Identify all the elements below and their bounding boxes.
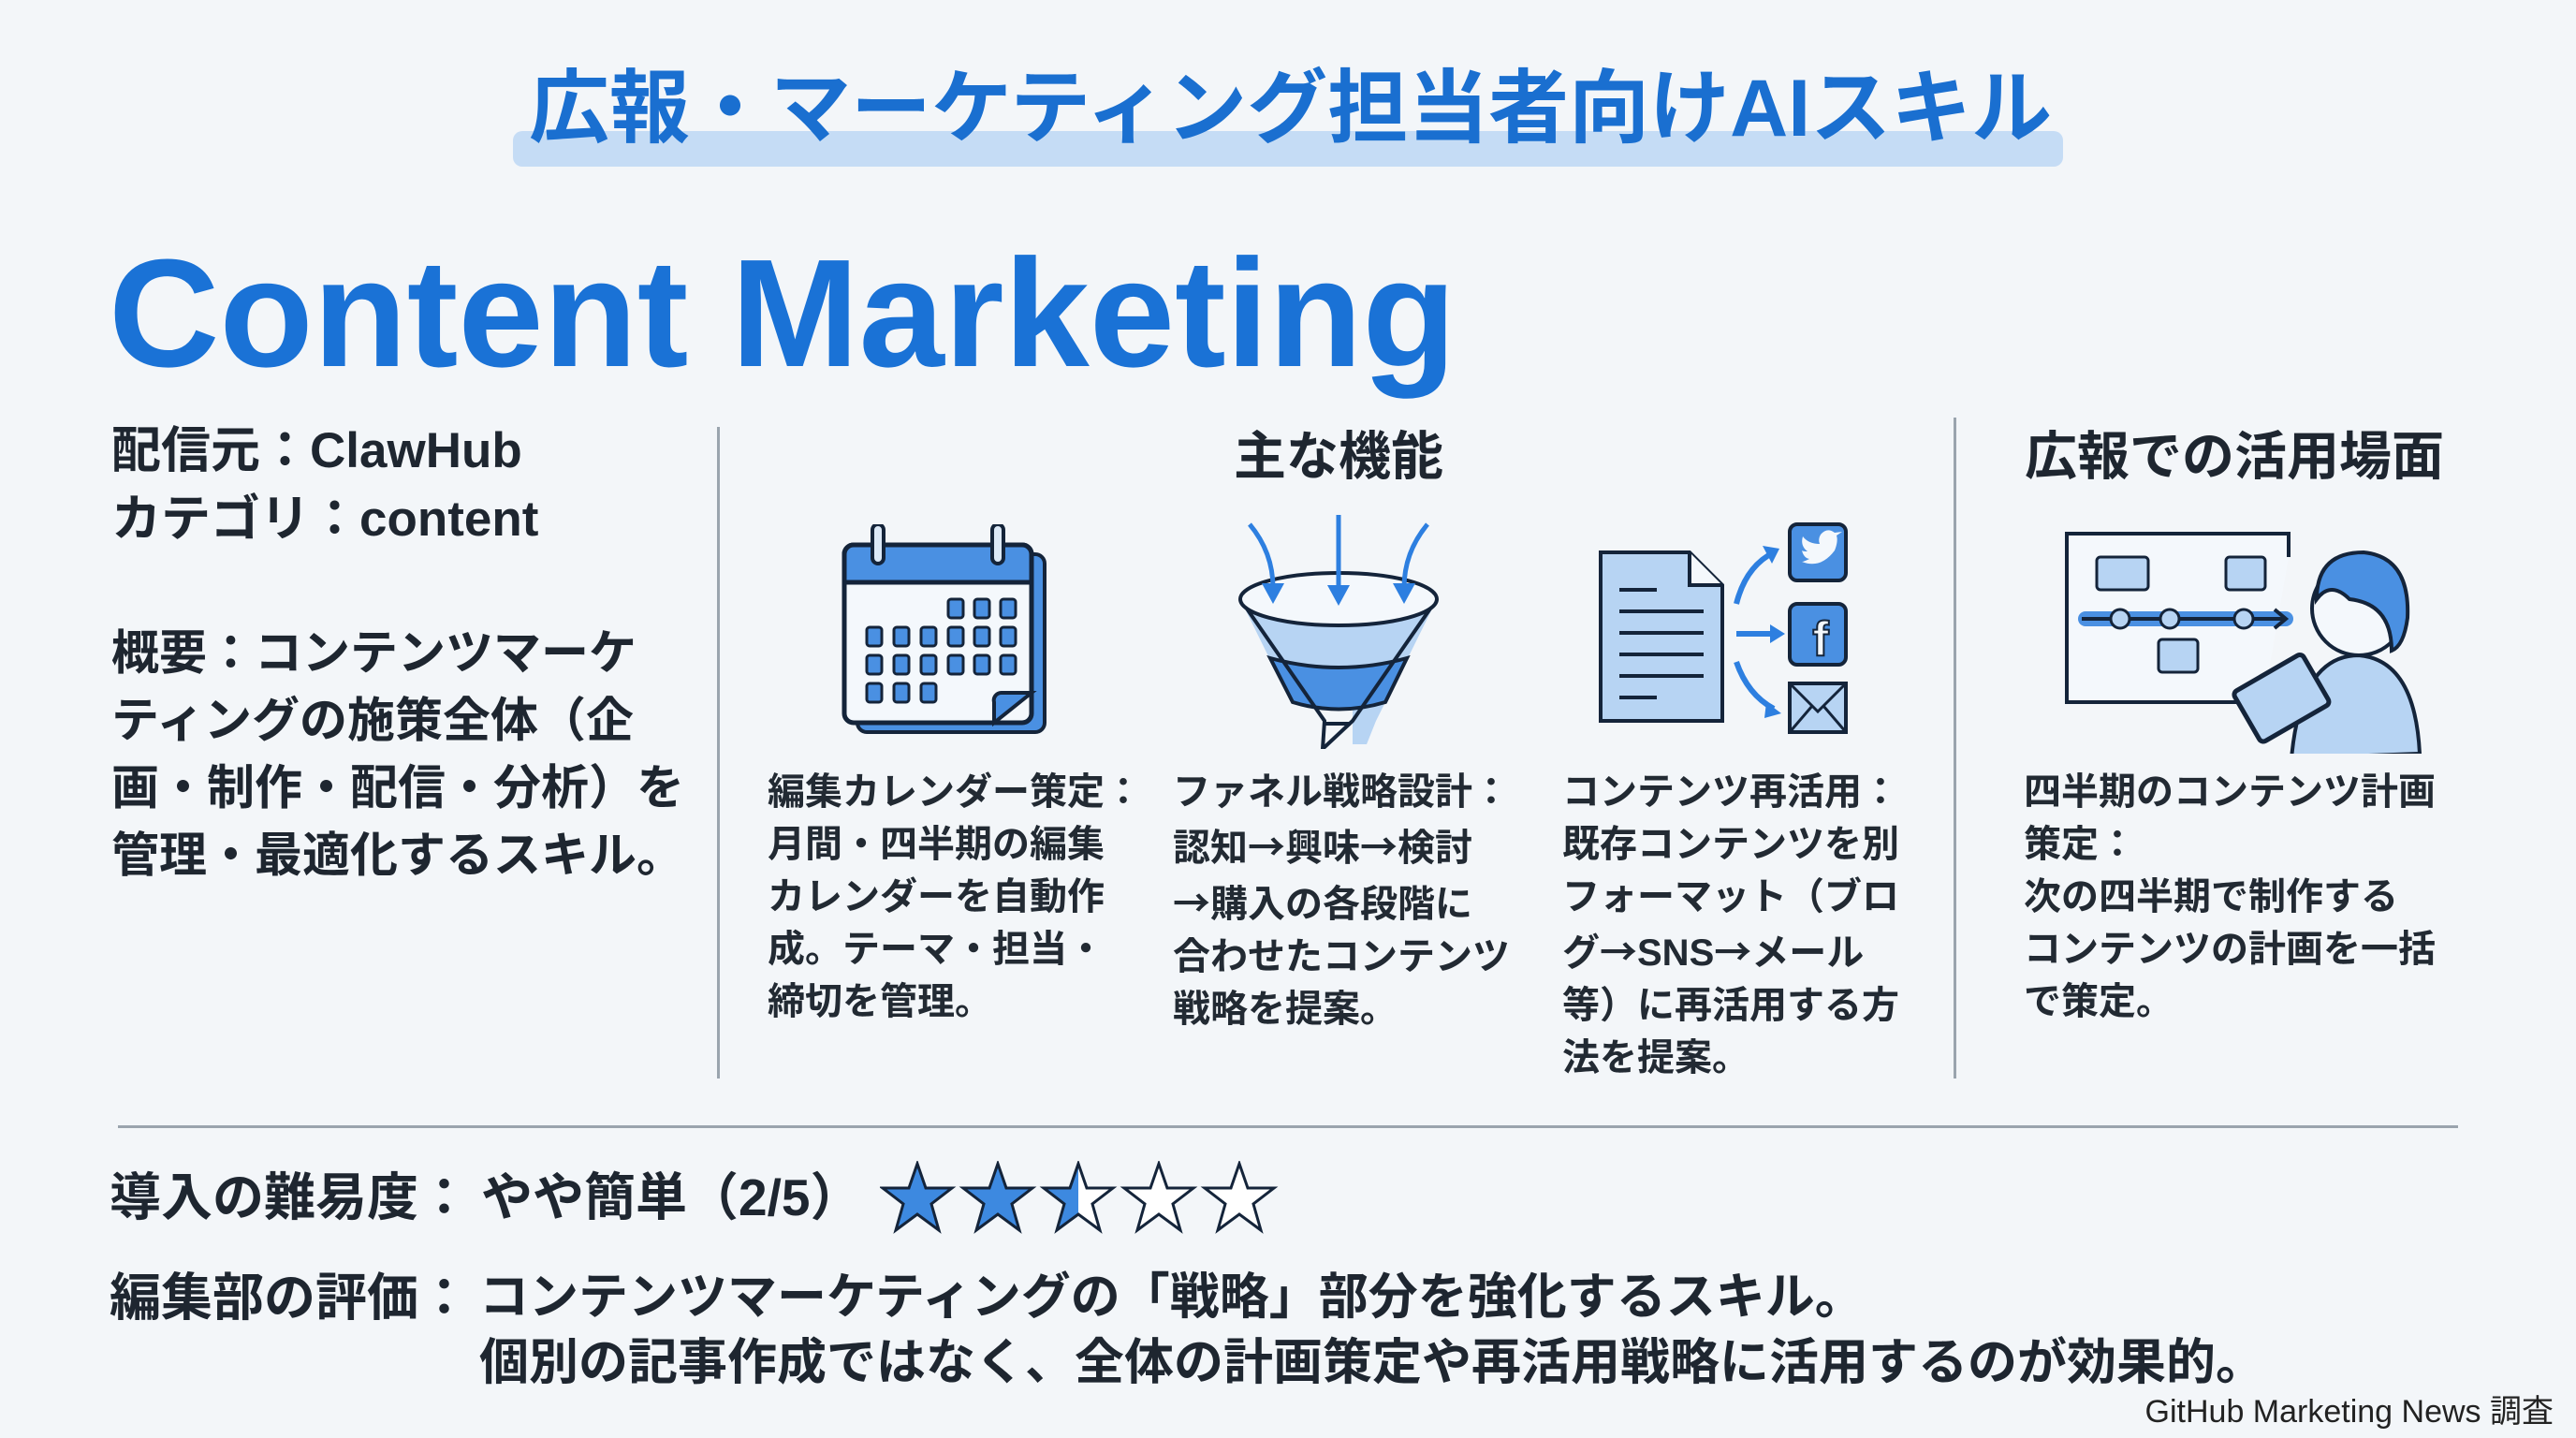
feature text 1: 成。テーマ・担当・ (768, 929, 1105, 970)
feature text 3: フォーマット（ブロ (1562, 876, 1899, 917)
icon: content repurpose (1599, 522, 1848, 734)
difficulty: 導入の難易度：やや簡単（2/5） (110, 1168, 861, 1226)
feature text 1: カレンダーを自動作 (768, 876, 1105, 917)
feature text 3 (1562, 771, 1899, 1078)
PR use text: コンテンツの計画を一括 (2024, 929, 2436, 970)
feature text 2: ファネル戦略設計： (1173, 771, 1510, 813)
feature text 2: 合わせたコンテンツ (1173, 936, 1510, 977)
icon: content repurpose: f (1812, 612, 1829, 667)
icon: funnel (1238, 515, 1439, 749)
feature text 1 (768, 771, 1142, 1022)
PR use text: 四半期のコンテンツ計画 (2024, 771, 2436, 813)
overview: 画・制作・配信・分析）を (111, 761, 684, 814)
title highlight bar (513, 131, 2063, 167)
title: 広報・マーケティング担当者向けAIスキル (529, 64, 2052, 154)
heading: main functions: 主な機能 (1234, 427, 1443, 486)
left info block: 配信元：ClawHub (111, 423, 522, 478)
overview: 概要：コンテンツマーケ (111, 626, 637, 680)
feature text 2 (1173, 771, 1510, 1030)
horizontal divider (118, 1125, 2458, 1128)
PR use text: 策定： (2024, 824, 2136, 865)
feature text 1: 締切を管理。 (768, 981, 992, 1022)
evaluation text: 個別の記事作成ではなく、全体の計画策定や再活用戦略に活用するのが効果的。 (479, 1335, 2265, 1390)
divider left (717, 427, 720, 1078)
heading: PR use: 広報での活用場面 (2025, 427, 2444, 486)
feature text 1: 月間・四半期の編集 (768, 824, 1105, 865)
feature text 2: 認知→興味→検討 (1173, 817, 1472, 872)
left info block (111, 423, 538, 547)
evaluation text (479, 1269, 2265, 1390)
feature text 2: →購入の各段階に (1173, 873, 1472, 928)
divider right (1954, 418, 1956, 1078)
overview: ティングの施策全体（企 (111, 694, 634, 747)
feature text 3: 既存コンテンツを別 (1562, 824, 1899, 865)
stars rating (880, 1161, 1279, 1234)
feature text 3: 法を提案。 (1562, 1037, 1749, 1078)
evaluation text: コンテンツマーケティングの「戦略」部分を強化するスキル。 (479, 1269, 1865, 1325)
PR use text: で策定。 (2024, 981, 2174, 1022)
source credit: GitHub Marketing News 調査 (2145, 1394, 2554, 1430)
overview (111, 626, 684, 882)
feature text 3: 等）に再活用する方 (1562, 985, 1899, 1026)
PR use text (2024, 771, 2436, 1022)
feature text 3: グ→SNS→メール (1562, 922, 1864, 976)
PR use text: 次の四半期で制作する (2024, 876, 2398, 917)
icon: calendar (842, 524, 1046, 734)
overview: 管理・最適化するスキル。 (111, 829, 684, 882)
feature text 3: コンテンツ再活用： (1562, 771, 1899, 813)
feature text 2: 戦略を提案。 (1173, 989, 1398, 1030)
icon: person with timeline (2065, 532, 2422, 754)
feature text 1: 編集カレンダー策定： (768, 771, 1142, 813)
editorial evaluation: 編集部の評価： (110, 1269, 470, 1327)
left info block: カテゴリ：content (111, 492, 538, 547)
main heading: Content Marketing (109, 227, 1456, 399)
